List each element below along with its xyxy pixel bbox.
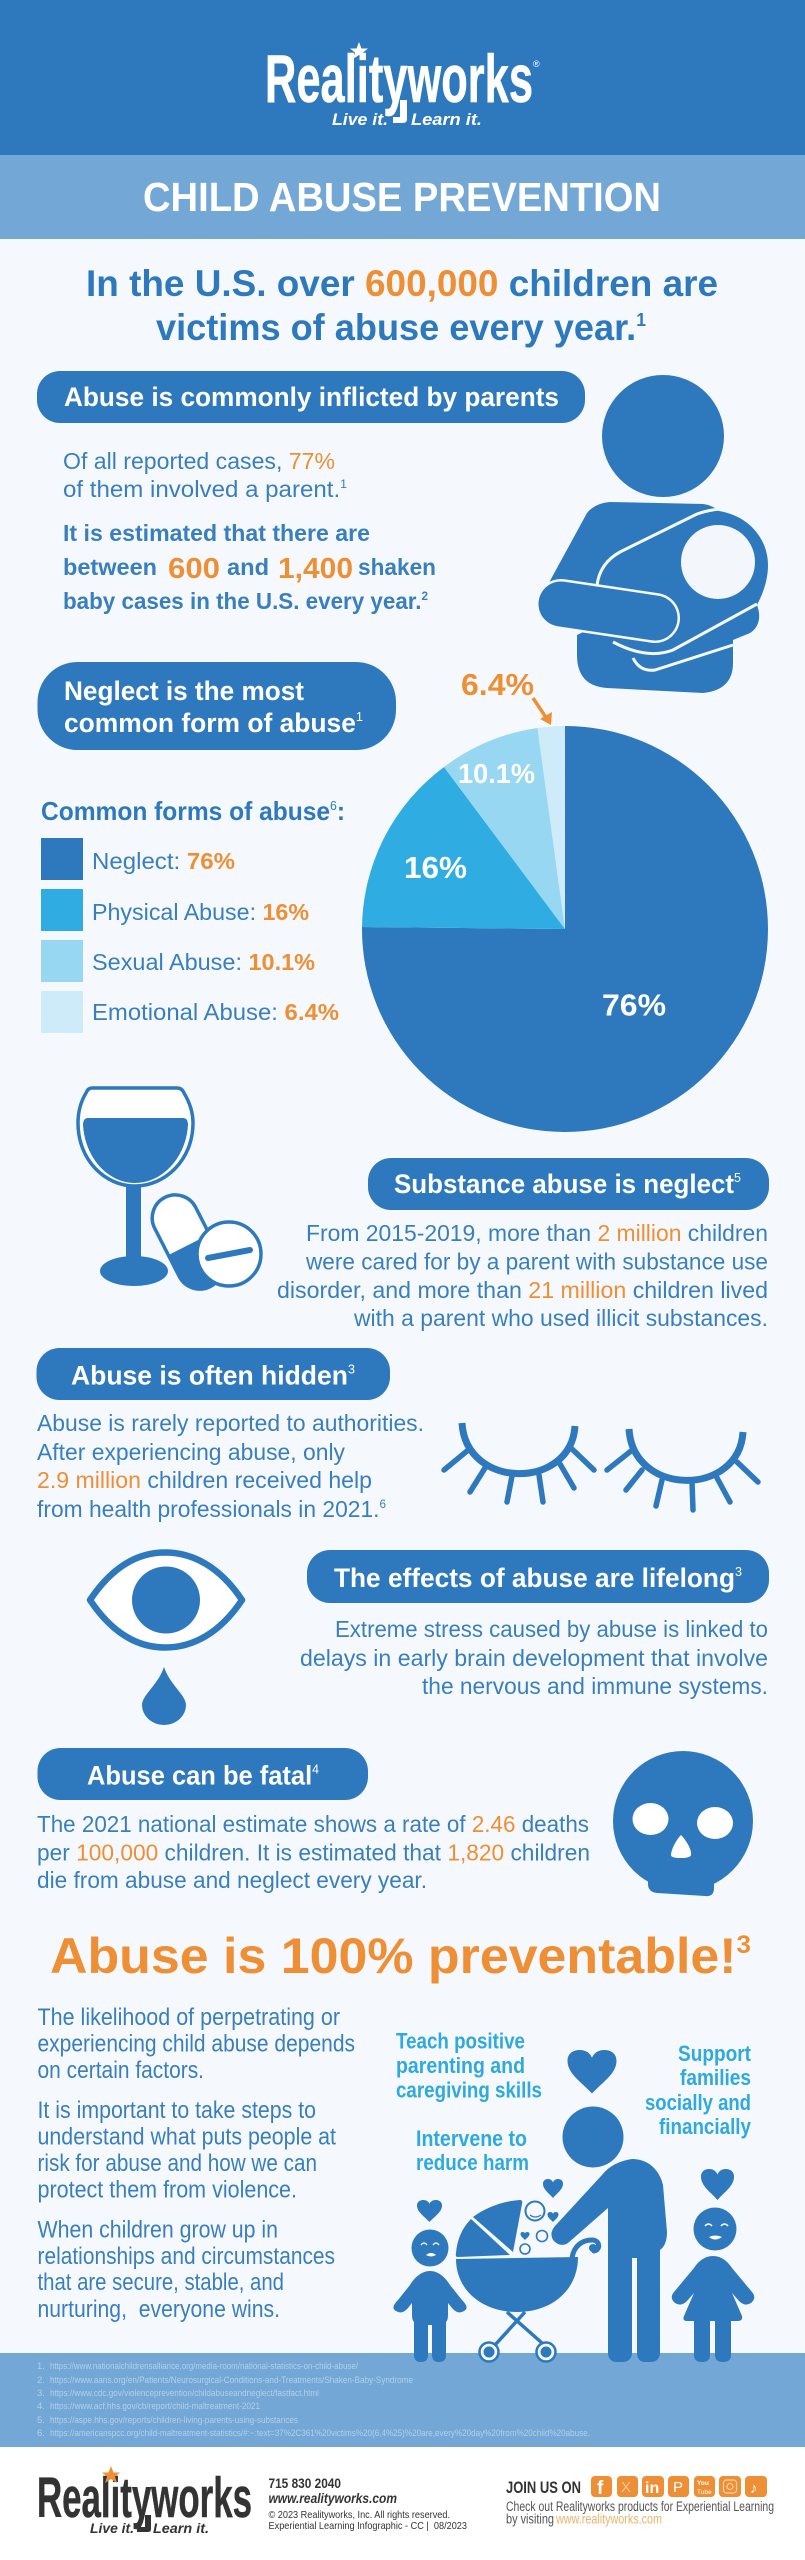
text: fatality statistics: The 2021 national estimate shows a rate of 2.46 deaths [37, 1811, 589, 1837]
text: support families: families [680, 2065, 751, 2090]
text: shaken baby cases: between [63, 554, 157, 580]
panel: abuse can be fatal [37, 1748, 753, 1896]
icon: adult with heart [551, 2050, 667, 2362]
pie chart: forms of abuse [362, 667, 768, 1132]
footer logo: Realityworks [37, 2466, 252, 2530]
contact details: Experiential Learning Infographic - CC | 08/2023 [268, 2520, 467, 2532]
text: 77 percent involve a parent: 1 [340, 477, 347, 491]
legend: common forms of abuse: Common forms of abuse [41, 796, 347, 826]
text: shaken baby cases: 2 [421, 589, 428, 603]
icon: skull [613, 1751, 753, 1896]
heading pill: neglect [38, 662, 396, 750]
heading pill: neglect: 1 [356, 709, 363, 724]
text block: risk factors: on certain factors. [38, 2057, 204, 2084]
heading: abuse is preventable: 3 [737, 1931, 751, 1959]
legend: common forms of abuse: Sexual Abuse: 10.1% [92, 949, 315, 975]
references band: 4. [37, 2401, 45, 2412]
references band: 3. [37, 2388, 45, 2399]
references band: 5. [37, 2415, 45, 2426]
social links: You [697, 2480, 709, 2487]
header banner with logo [0, 0, 805, 155]
heading pill: hidden: Abuse is often hidden [71, 1360, 353, 1390]
panel: abuse is often hidden [36, 1348, 758, 1522]
social links: f [597, 2478, 604, 2499]
social links: ♪ [750, 2480, 758, 2497]
text block: risk factors: protect them from violence. [38, 2176, 297, 2204]
pie chart: forms of abuse: 10.1% [458, 758, 535, 789]
contact details: www.realityworks.com [268, 2490, 397, 2506]
text: substance abuse statistics: were cared for by a parent with substance use [305, 1248, 768, 1274]
text: hidden abuse [37, 1410, 424, 1522]
heading pill: fatal: 4 [312, 1762, 319, 1776]
header banner with logo: Realityworks [265, 41, 533, 117]
text block: risk factors: It is important to take steps to [38, 2097, 316, 2124]
text: 77 percent involve a parent: of them involved a parent. [63, 476, 333, 502]
icon: wine glass and pills [78, 1088, 261, 1297]
legend: common forms of abuse: Physical Abuse: 16% [92, 899, 309, 925]
heading pill: fatal [38, 1748, 368, 1800]
text: shaken baby cases: and [227, 554, 269, 580]
callout: 6.4 percent arrow [461, 667, 552, 725]
footer [0, 2447, 805, 2560]
text: hidden abuse: from health professionals in 2021. [37, 1496, 390, 1522]
text block: risk factors: The likelihood of perpetrating or [38, 2004, 340, 2031]
header banner with logo: Learn it. [411, 111, 482, 129]
panel: abuse inflicted by parents [37, 371, 768, 693]
text: teach positive parenting: caregiving skills [396, 2078, 542, 2102]
icon: right child [672, 2169, 754, 2362]
legend: common forms of abuse: 6 [330, 798, 337, 813]
references band: 2. [37, 2375, 45, 2386]
legend: common forms of abuse: Emotional Abuse: 6.4% [92, 999, 339, 1025]
text block: risk factors: understand what puts people at [38, 2124, 336, 2150]
text: fatality statistics [37, 1811, 590, 1893]
text block: risk factors: risk for abuse and how we can [38, 2150, 317, 2177]
pie chart: forms of abuse: 76% [602, 988, 666, 1022]
text: effects of stress: Extreme stress caused by abuse is linked to [335, 1616, 768, 1642]
text: hidden abuse: Abuse is rarely reported to authorities. [37, 1410, 424, 1436]
text block: risk factors [38, 2004, 355, 2323]
text: intervene to reduce harm: reduce harm [416, 2150, 529, 2175]
text: shaken baby cases: shaken [358, 554, 436, 580]
text: hidden abuse: 6 [380, 1497, 386, 1511]
icon: crying eye [90, 1552, 242, 1725]
text: shaken baby cases [63, 520, 436, 614]
text: teach positive parenting: parenting and [396, 2053, 525, 2078]
social links: X [621, 2479, 631, 2496]
text: fatality statistics: die from abuse and neglect every year. [37, 1867, 427, 1893]
text block: risk factors: that are secure, stable, and [38, 2269, 284, 2296]
social links [506, 2476, 767, 2499]
text: fatality statistics: per 100,000 children. It is estimated that 1,820 children [37, 1840, 590, 1866]
text: support families: financially [659, 2114, 752, 2139]
social links: JOIN US ON [506, 2478, 581, 2497]
contact details [268, 2476, 467, 2532]
references band: https://aspe.hhs.gov/reports/children-living-parents-using-substances [50, 2415, 298, 2426]
text: substance abuse statistics: with a parent who used illicit substances. [353, 1305, 768, 1331]
social links: P [673, 2479, 683, 2496]
heading pill: hidden [36, 1348, 390, 1400]
legend: common forms of abuse: : [337, 796, 345, 826]
heading pill: substance abuse: 5 [734, 1170, 741, 1185]
heading pill: lifelong effects [307, 1550, 769, 1603]
text block: risk factors: nurturing, everyone wins. [38, 2296, 280, 2323]
pie chart: forms of abuse: 16% [404, 850, 467, 885]
text block: risk factors: experiencing child abuse depends [38, 2030, 355, 2058]
text: shaken baby cases: 1,400 [278, 553, 353, 585]
footer message [506, 2499, 774, 2526]
text: 77 percent involve a parent [63, 448, 347, 502]
icon: closed eyes with lashes [444, 1423, 758, 1510]
references band: https://www.acf.hhs.gov/cb/report/child-maltreatment-2021 [50, 2401, 260, 2412]
text: 77 percent involve a parent: Of all reported cases, 77% [63, 448, 335, 474]
references band [0, 2353, 805, 2447]
heading pill: hidden: 3 [348, 1362, 355, 1376]
panel: neglect [38, 662, 768, 1132]
heading pill: parents [37, 371, 585, 423]
panel: effects are lifelong [90, 1550, 769, 1725]
social links: Tube [697, 2489, 712, 2496]
social links: in [645, 2480, 659, 2497]
title band: CHILD ABUSE PREVENTION [143, 174, 661, 220]
references band: https://www.aans.org/en/Patients/Neurosurgical-Conditions-and-Treatments/Shaken-Baby-Syndrome [50, 2375, 413, 2386]
headline statistic: 1 [636, 310, 646, 330]
heading: abuse is preventable: Abuse is 100% preventable! [50, 1928, 711, 1984]
legend: common forms of abuse [41, 796, 345, 1033]
heading pill: lifelong effects: The effects of abuse are lifelong [334, 1563, 747, 1593]
text: support families: Support [678, 2041, 752, 2066]
references band: https://americanspcc.org/child-maltreatment-statistics/#:~:text=37%2C361%20victims%20(6.4%25)%20are,every%20day%20from%20child%20abuse. [50, 2428, 590, 2439]
heading pill: substance abuse [368, 1158, 769, 1210]
title band [0, 155, 805, 239]
contact details: 715 830 2040 [268, 2476, 341, 2491]
heading pill: neglect: common form of abuse [64, 708, 363, 738]
heading pill: substance abuse: Substance abuse is neglect [394, 1169, 748, 1199]
header banner with logo: ® [533, 59, 540, 69]
heading pill: lifelong effects: 3 [735, 1564, 742, 1579]
text: teach positive parenting: Teach positive [396, 2028, 525, 2054]
heading pill: neglect: Neglect is the most [64, 676, 304, 706]
icon: stroller with baby faces and hearts [456, 2179, 599, 2362]
icon: left child [393, 2200, 467, 2362]
text: hidden abuse: 2.9 million children received help [37, 1467, 372, 1493]
references band: 1. [37, 2361, 45, 2372]
text: effects of stress [300, 1616, 768, 1699]
text block: risk factors: relationships and circumstances [38, 2243, 335, 2270]
footer message: www.realityworks.com [555, 2512, 662, 2526]
text: support families: socially and [645, 2090, 751, 2115]
text: support families [645, 2041, 752, 2139]
callout: 6.4 percent arrow: 6.4% [461, 667, 534, 702]
references band: 6. [37, 2428, 45, 2439]
text: shaken baby cases: 600 [168, 553, 220, 585]
text: substance abuse statistics [277, 1220, 768, 1331]
text: substance abuse statistics: From 2015-2019, more than 2 million children [306, 1220, 768, 1246]
footer message: by visiting [506, 2512, 554, 2526]
text: intervene to reduce harm [416, 2126, 529, 2175]
heading pill: fatal: Abuse can be fatal [87, 1760, 326, 1790]
text: effects of stress: the nervous and immune systems. [422, 1673, 768, 1699]
references band: https://www.cdc.gov/violenceprevention/childabuseandneglect/fastfact.html [50, 2388, 319, 2399]
text: teach positive parenting [396, 2028, 542, 2102]
headline statistic: victims of abuse every year. [156, 307, 648, 348]
legend: common forms of abuse: Neglect: 76% [92, 848, 235, 874]
text: effects of stress: delays in early brain development that involve [300, 1645, 768, 1671]
contact details: © 2023 Realityworks, Inc. All rights reserved. [268, 2509, 450, 2521]
headline statistic [86, 263, 718, 348]
text: shaken baby cases: baby cases in the U.S. every year. [63, 588, 431, 614]
illustration: family with stroller [393, 2050, 754, 2362]
panel: substance abuse [78, 1088, 769, 1331]
icon: parent holding baby [545, 375, 768, 693]
text: substance abuse statistics: disorder, and more than 21 million children lived [277, 1277, 768, 1303]
references band: https://www.nationalchildrensalliance.org/media-room/national-statistics-on-child-abuse/ [50, 2361, 358, 2372]
headline statistic: In the U.S. over 600,000 children are [86, 263, 718, 304]
footer logo [37, 2466, 252, 2536]
footer logo: Live it. [90, 2520, 134, 2536]
footer logo: Learn it. [153, 2520, 209, 2536]
text: intervene to reduce harm: Intervene to [416, 2126, 527, 2151]
header banner with logo: Live it. [332, 111, 388, 129]
text: hidden abuse: After experiencing abuse, only [37, 1439, 345, 1465]
heading pill: parents: Abuse is commonly inflicted by parents [64, 382, 559, 412]
text: shaken baby cases: It is estimated that there are [63, 520, 370, 546]
text block: risk factors: When children grow up in [38, 2216, 278, 2244]
